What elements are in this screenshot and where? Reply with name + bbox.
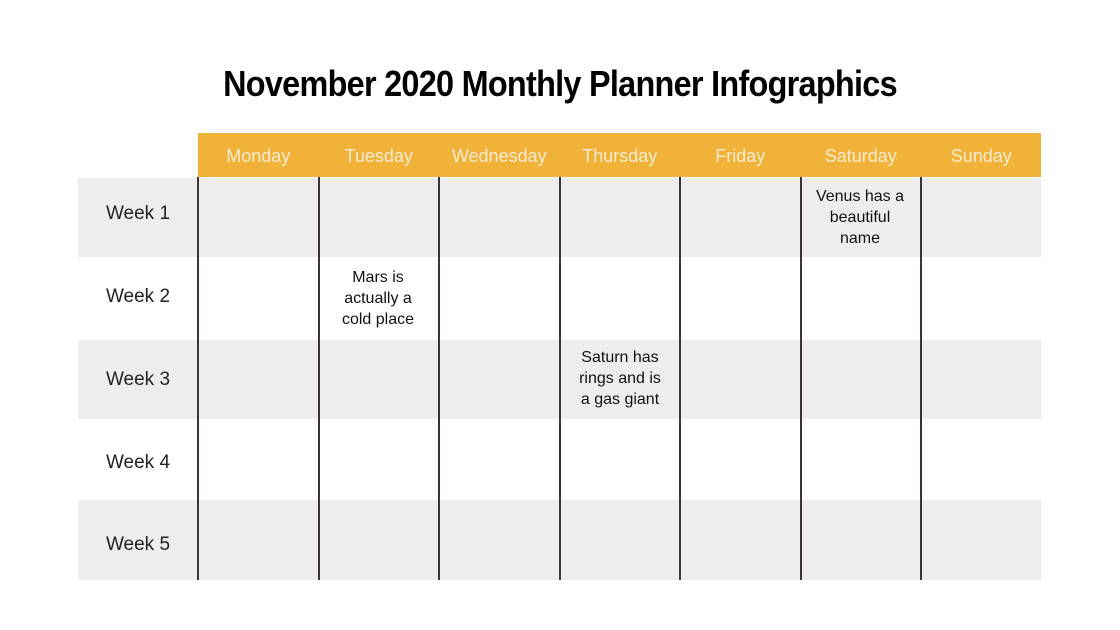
header bar: days: Wednesday: [452, 146, 547, 166]
title: November 2020 Monthly Planner Infographics: [223, 63, 897, 104]
note: Saturday week 1: Venus has a beautiful name: [816, 188, 904, 247]
header bar: days: Friday: [715, 146, 765, 166]
header bar: days: Tuesday: [345, 146, 413, 166]
header bar: days: Thursday: [582, 146, 657, 166]
row: week 1: Week 1: [106, 203, 170, 224]
row: week 5: [78, 500, 1041, 580]
header bar: days: Saturday: [825, 146, 897, 166]
note: Thursday week 3: Saturn has rings and is a gas giant: [579, 349, 661, 408]
header bar: days: Monday: [226, 146, 290, 166]
row: week 3: Week 3: [106, 369, 170, 390]
row: week 1: [78, 178, 1041, 257]
header bar: days: [198, 133, 1041, 177]
row: week 2: Week 2: [106, 286, 170, 307]
row: week 3: [78, 340, 1041, 419]
row: week 5: Week 5: [106, 534, 170, 555]
header bar: days: Sunday: [951, 146, 1012, 166]
note: Tuesday week 2: Mars is actually a cold place: [342, 269, 414, 328]
row: week 4: Week 4: [106, 452, 170, 473]
